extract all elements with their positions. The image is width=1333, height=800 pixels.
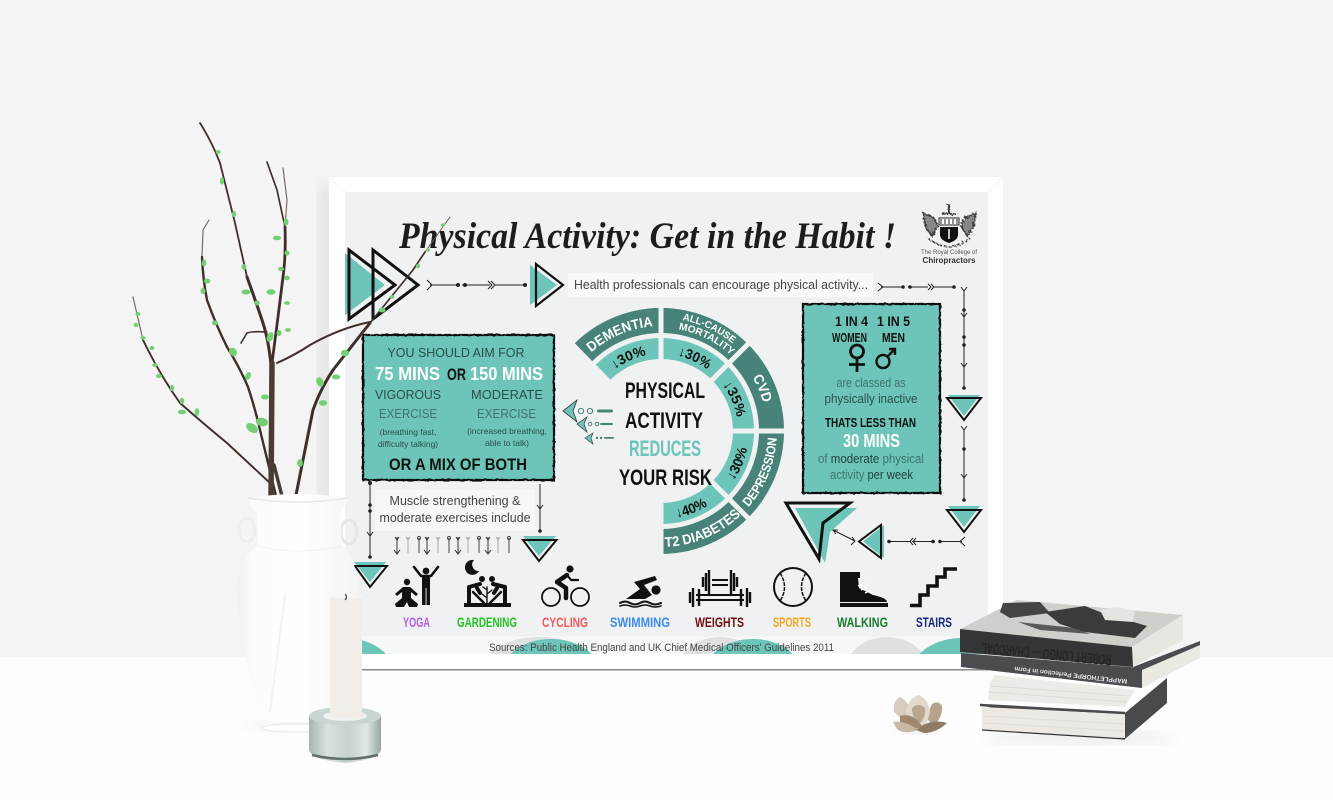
ring centre heading: ACTIVITY — [625, 408, 703, 433]
label: stairs: STAIRS — [916, 614, 952, 630]
sources: Sources: Public Health England and UK Chief Medical Officers' Guidelines 2011 — [489, 642, 834, 654]
ring centre heading: REDUCES — [629, 436, 701, 461]
label: yoga: YOGA — [403, 614, 430, 630]
men label: MEN — [882, 330, 905, 345]
label: weights: WEIGHTS — [695, 614, 744, 630]
small vertical arrows row — [394, 536, 510, 554]
ring centre heading: PHYSICAL — [625, 378, 705, 403]
segment: depression: DEPRESSION — [742, 438, 777, 507]
label: sports: SPORTS — [773, 614, 811, 630]
icon: gardening — [464, 560, 511, 607]
thirty minutes: 30 MINS — [843, 431, 900, 451]
icon: speed arrows pointing left — [563, 400, 614, 444]
arrow: right vertical two — [961, 426, 967, 501]
mix of both: OR A MIX OF BOTH — [389, 455, 527, 474]
statistic: men: 1 IN 5 — [877, 313, 910, 329]
women label: WOMEN — [832, 330, 867, 345]
icon: yoga — [395, 567, 438, 607]
icon: sports ball — [774, 568, 812, 606]
icon: down triangle right — [523, 536, 556, 561]
moderate minutes: 150 MINS — [470, 364, 543, 384]
label: gardening: GARDENING — [457, 614, 517, 630]
moderate activity line two: activity per week — [830, 468, 914, 482]
vase shadow — [245, 722, 355, 730]
value: depression: ↓30% — [728, 448, 747, 478]
logo: Royal College of Chiropractors — [921, 204, 977, 265]
label: cycling: CYCLING — [542, 614, 588, 630]
arrow: left column vertical — [367, 482, 373, 558]
value: cvd: ↓35% — [724, 382, 746, 416]
panel: weekly exercise recommendation — [363, 335, 554, 480]
less than: THATS LESS THAN — [825, 415, 916, 430]
icon: left triangle — [859, 525, 884, 558]
arrow: top right horizontal — [878, 283, 955, 291]
physically inactive: physically inactive — [824, 392, 918, 406]
segment: t2 diabetes: T2 DIABETES — [664, 510, 740, 547]
are classed as: are classed as — [836, 376, 906, 390]
icon: down triangle left — [354, 562, 387, 587]
icon: cycling — [542, 565, 589, 606]
icon: play triangle — [530, 264, 563, 306]
logo: Royal College of Chiropractors: Chiropractors — [923, 256, 976, 265]
vigorous note: (breathing fast, — [380, 427, 436, 437]
icon: walking boot — [840, 572, 888, 607]
vigorous minutes: 75 MINS — [375, 364, 440, 384]
segment: dementia: DEMENTIA — [586, 317, 653, 352]
crest scribble — [923, 204, 976, 247]
bottom book — [980, 678, 1167, 739]
branches in vase — [133, 123, 450, 500]
vigorous label: VIGOROUS — [375, 387, 441, 402]
icon: big pointer — [786, 503, 857, 563]
ring centre heading: YOUR RISK — [619, 465, 712, 490]
arrow: right vertical one — [961, 287, 967, 389]
title: Physical Activity: Get in the Habit ! — [398, 216, 896, 257]
segment: all-cause mortality: ALL-CAUSE — [682, 314, 736, 344]
third book — [988, 675, 1135, 707]
icon: stairs — [910, 569, 957, 606]
lotus flower ornament — [893, 695, 947, 734]
value: diabetes: ↓40% — [678, 498, 707, 518]
exercise left: EXERCISE — [379, 406, 437, 421]
callout: muscle strengthening — [375, 490, 535, 531]
top book — [960, 600, 1183, 668]
or: OR — [447, 365, 466, 384]
exercise right: EXERCISE — [477, 406, 536, 421]
footer strip with semicircles — [362, 637, 982, 654]
poster frame — [329, 177, 1003, 670]
second book: MAPPLETHORPE Perfection in Form — [1014, 665, 1128, 684]
icon: female symbol — [849, 345, 865, 372]
heading: YOU SHOULD AIM FOR — [388, 345, 524, 360]
value: dementia: ↓30% — [612, 346, 646, 368]
icon: double play triangles — [345, 250, 418, 319]
callout: muscle strengthening: moderate exercises include — [380, 510, 530, 525]
arrow: lower right horizontal — [888, 537, 965, 546]
icon: swimming — [620, 576, 661, 607]
moderate note: (increased breathing, — [467, 426, 547, 436]
value: mortality: ↓30% — [680, 348, 711, 368]
ring centre heading — [619, 378, 712, 490]
icon: down triangle one — [947, 395, 981, 420]
second book — [961, 641, 1200, 688]
percentage band — [603, 348, 743, 514]
top book: ROBERT LONGO — CHARCOAL — [981, 639, 1112, 668]
arrow: to first triangle — [427, 280, 526, 290]
icon: male symbol — [876, 349, 895, 368]
panel: inactivity statistics — [803, 304, 940, 493]
icon: weights — [690, 570, 750, 607]
candle in glass holder — [309, 594, 381, 763]
moderate label: MODERATE — [471, 387, 543, 402]
chart: risk reduction ring — [574, 308, 784, 554]
floor — [0, 657, 1333, 800]
box border — [363, 335, 554, 480]
label: swimming: SWIMMING — [610, 614, 670, 630]
leaf buds — [134, 150, 445, 466]
segment: cvd: CVD — [754, 374, 772, 402]
statistic: women: 1 IN 4 — [835, 313, 868, 329]
callout: muscle strengthening: Muscle strengthening & — [390, 493, 521, 508]
callout: health professionals — [568, 273, 873, 297]
label: walking: WALKING — [837, 614, 888, 630]
moderate activity line one: of moderate physical — [818, 452, 924, 466]
segment: mortality line: MORTALITY — [679, 322, 736, 354]
arrow: right column vertical — [537, 484, 543, 532]
logo: Royal College of Chiropractors: The Royal College of — [921, 250, 977, 256]
arrow: to pointer — [833, 530, 855, 545]
icon: down triangle two — [947, 506, 981, 532]
frame shadow — [320, 184, 332, 658]
callout: health professionals: Health professionals can encourage physical activity... — [574, 277, 868, 292]
book stack — [960, 600, 1200, 743]
box border — [803, 304, 940, 493]
condition band — [584, 320, 771, 542]
moderate note: able to talk) — [485, 438, 529, 448]
vase — [237, 494, 358, 732]
vigorous note: difficulty talking) — [378, 439, 438, 449]
